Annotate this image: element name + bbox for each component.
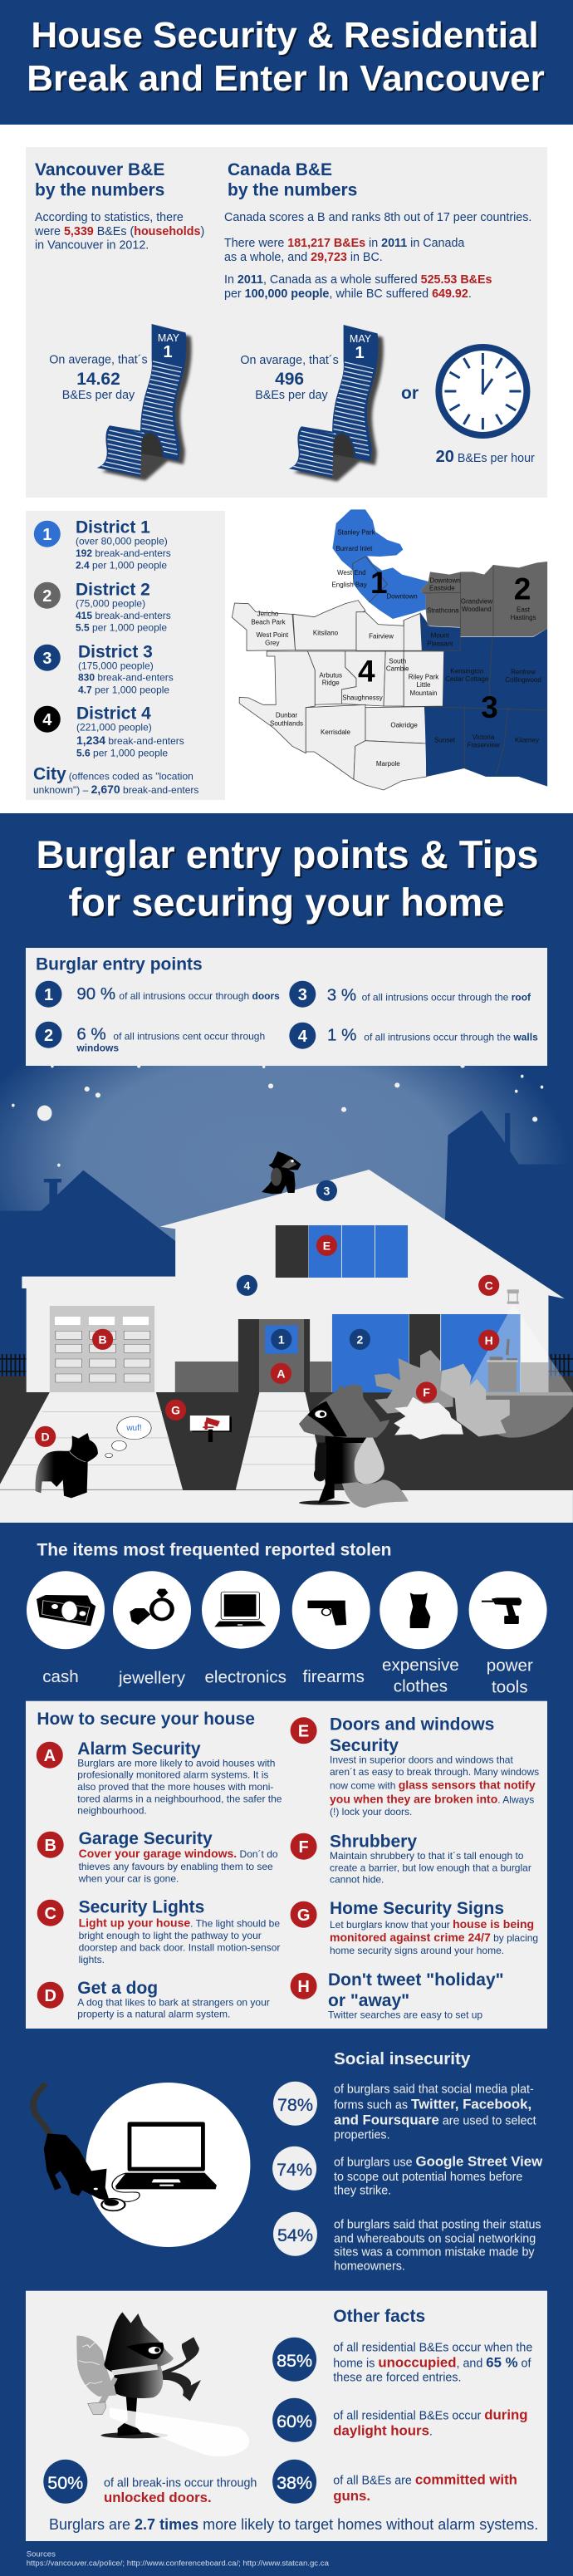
- dog: [36, 1433, 98, 1498]
- map labels: East: [517, 606, 531, 613]
- stat 50%: unlocked doors.: [104, 2490, 212, 2505]
- entry point 4: of all intrusions occur through the walls: [364, 1032, 538, 1043]
- panel: how to secure your house: [26, 1701, 547, 2029]
- tip B: [37, 1829, 278, 1884]
- map labels: West Point: [257, 631, 289, 639]
- map labels: Shaughnessy: [342, 694, 383, 702]
- map labels: South: [389, 657, 406, 665]
- text: per hour: 20 B&Es per hour: [436, 448, 535, 466]
- icon: power drill: [482, 1597, 522, 1624]
- section heading: Social insecurity: [334, 2049, 471, 2068]
- tip C: bright enough to light the pathway to your: [79, 1930, 262, 1941]
- entry point 2: [35, 1022, 265, 1054]
- entry point 4: [289, 1023, 538, 1049]
- title text: Break and Enter In Vancouver: [27, 58, 545, 99]
- illustration: cat and laptop: [33, 2083, 250, 2247]
- text: Vancouver statistics: were 5,339 B&Es (households): [34, 225, 204, 238]
- driveway: [0, 1392, 183, 1490]
- icon: clock: [438, 347, 526, 435]
- stat 78%: properties.: [334, 2128, 390, 2142]
- district 4: [34, 704, 184, 759]
- tip C: C: [44, 1905, 56, 1923]
- tip F: Shrubbery: [330, 1833, 417, 1852]
- tip G: home security signs around your home.: [330, 1945, 504, 1956]
- district 3: (175,000 people): [78, 660, 154, 671]
- icon: calendar scroll Canada: MAY: [350, 333, 372, 345]
- burglar raccoon large: [299, 1385, 409, 1508]
- map labels: [251, 528, 541, 768]
- scene: house at night: [0, 1064, 573, 1524]
- tip E: E: [298, 1723, 309, 1741]
- text: Vancouver per day: On average, that´s: [49, 354, 148, 367]
- tip F: cannot hide.: [330, 1874, 384, 1886]
- item labels: cash: [42, 1667, 79, 1686]
- icon: calendar scroll Vancouver: 1: [163, 343, 173, 361]
- section: items most frequently stolen: [0, 1523, 573, 1701]
- tip C: Light up your house. The light should be: [79, 1916, 280, 1929]
- text: Vancouver per day: [49, 354, 148, 402]
- tip A: Alarm Security: [77, 1739, 201, 1759]
- icon: calendar scroll Canada: 1: [355, 344, 365, 362]
- district 3: 4.7 per 1,000 people: [78, 684, 169, 695]
- marker circles: 1: [278, 1332, 285, 1346]
- tip G: Home Security Signs: [330, 1899, 504, 1918]
- fences: [0, 1354, 573, 1376]
- map labels: Hastings: [510, 614, 536, 621]
- district 1: 192 break-and-enters: [76, 547, 171, 559]
- tip E: (!) lock your doors.: [330, 1806, 412, 1818]
- text: Vancouver statistics: in Vancouver in 2012.: [35, 239, 149, 253]
- tip C: [37, 1898, 280, 1965]
- tip A: Burglars are more likely to avoid houses with: [77, 1757, 275, 1769]
- district 2: 415 break-and-enters: [76, 610, 171, 621]
- tip C: Security Lights: [79, 1898, 204, 1917]
- closing statement: Burglars are 2.7 times more likely to target homes without alarm systems.: [49, 2516, 538, 2533]
- map labels: Fraserview: [467, 741, 500, 748]
- stat 85%: 85%: [277, 2351, 312, 2371]
- heading: burglar entry points and tips: Burglar entry points & Tips: [37, 832, 538, 876]
- night sky gradient: [0, 980, 573, 1412]
- marker circles: 3: [324, 1184, 331, 1197]
- tip B: thieves any favours by enabling them to see: [79, 1861, 273, 1872]
- tip H: Don't tweet "holiday": [328, 1970, 504, 1990]
- header: main title: [0, 0, 573, 125]
- tip E: Security: [330, 1736, 399, 1755]
- front door: [238, 1319, 310, 1392]
- entry point 1: [35, 981, 280, 1008]
- district 1: (over 80,000 people): [76, 536, 168, 547]
- tip E: [291, 1715, 539, 1818]
- map labels: Strathcona: [427, 607, 459, 615]
- title text: House Security & Residential: [31, 15, 539, 56]
- heading: Vancouver B&E: Vancouver B&E: [35, 160, 164, 179]
- entry point 2: 2: [44, 1027, 53, 1045]
- tip F: [291, 1833, 531, 1886]
- stat 74%: they strike.: [334, 2184, 391, 2197]
- entry point 1: 1: [44, 986, 53, 1004]
- tip C: doorstep and back door. Install motion-sensor: [79, 1942, 280, 1954]
- text: Canada statistics: There were 181,217 B&Es in 2011 in Canada: [224, 237, 464, 250]
- heading: Canada B&E: Canada B&E: [228, 160, 332, 179]
- district 4: District 4: [76, 704, 151, 723]
- sidewalk: [0, 1490, 573, 1524]
- marker circles: F: [423, 1386, 430, 1399]
- tip D: property is a natural alarm system.: [77, 2009, 230, 2020]
- city offences: City: [33, 764, 66, 783]
- marker circles: 2: [357, 1332, 364, 1346]
- map labels: Kitsilano: [313, 630, 339, 637]
- tip H: [291, 1970, 504, 2020]
- city offences: (offences coded as "location: [69, 770, 193, 782]
- entry point 1: of all intrusions occur through doors: [119, 990, 280, 1002]
- district 1: [34, 518, 171, 572]
- shrubs: [375, 1350, 510, 1440]
- tip H: H: [297, 1978, 310, 1996]
- stat 60%: [272, 2398, 527, 2442]
- item circles: [27, 1571, 547, 1649]
- map labels: Mountain: [410, 689, 437, 697]
- house body: [22, 1170, 565, 1392]
- section: social insecurity: [272, 2049, 543, 2273]
- garage door: [50, 1306, 154, 1392]
- item labels: power: [487, 1656, 533, 1676]
- icon: jewellery: [130, 1589, 172, 1625]
- heading: burglar entry points and tips: for securing your home: [69, 881, 504, 925]
- stat 78%: of burglars said that social media plat-: [334, 2083, 534, 2096]
- tip A: profesionally monitored alarm systems. It is: [77, 1769, 268, 1781]
- text: Vancouver statistics: According to statistics, there: [35, 211, 184, 224]
- stat 78%: forms such as Twitter, Facebook,: [334, 2096, 531, 2112]
- entry point 3: [289, 981, 531, 1008]
- heading: Vancouver B&E: by the numbers: [35, 181, 164, 200]
- map labels: Riley Park: [409, 674, 439, 681]
- item labels: expensive: [382, 1656, 459, 1675]
- map labels: Kilarney: [515, 736, 539, 743]
- district 2: District 2: [76, 580, 150, 599]
- dark blue section background: [0, 813, 573, 2576]
- marker circles: C: [485, 1278, 493, 1292]
- tip F: create a barrier, but low enough that a burglar: [330, 1862, 531, 1873]
- map labels: Mount: [431, 632, 450, 640]
- icon: calendar scroll Vancouver: [97, 324, 192, 480]
- stat 85%: these are forced entries.: [333, 2372, 461, 2385]
- marker circles: D: [42, 1430, 50, 1443]
- entry point 4: 4: [298, 1028, 308, 1046]
- stat 38%: guns.: [333, 2488, 370, 2504]
- icon: calendar scroll Canada: [289, 325, 384, 481]
- district 1: District 1: [76, 518, 150, 537]
- map labels: West End: [337, 569, 366, 577]
- text: Vancouver statistics: [34, 211, 204, 253]
- tip F: Maintain shrubbery to that it´s tall enough to: [330, 1850, 524, 1862]
- tip F: F: [298, 1838, 309, 1857]
- tip G: [291, 1899, 538, 1956]
- map labels: Victoria: [473, 734, 495, 741]
- burglar raccoon on roof: [262, 1151, 301, 1194]
- wuf text: wuf!: [125, 1424, 142, 1433]
- map labels: Downtown: [429, 577, 461, 584]
- map labels: Cedar Cottage: [445, 675, 489, 683]
- district 4: 5.6 per 1,000 people: [76, 748, 168, 759]
- district 2: 2: [42, 587, 51, 606]
- text: Canada per day: [240, 354, 339, 402]
- foundations: [175, 1362, 238, 1392]
- sources: https://vancouver.ca/police/; http://www.conferenceboard.ca/; http://www.statcan.gc.ca: [27, 2559, 330, 2569]
- stat 78%: [273, 2082, 536, 2142]
- city offences: [33, 764, 198, 796]
- ground: [0, 1376, 573, 1490]
- map labels: Renfrew: [511, 669, 536, 676]
- lower windows: [332, 1314, 521, 1392]
- section heading: The items most frequented reported stolen: [37, 1540, 391, 1559]
- item labels: [42, 1656, 533, 1696]
- tip B: Garage Security: [79, 1829, 213, 1848]
- stat 38%: [272, 2460, 517, 2504]
- marker circles: E: [323, 1239, 331, 1252]
- text: or: or: [401, 384, 419, 403]
- map labels: Woodland: [462, 606, 492, 613]
- stat 74%: of burglars use Google Street View: [334, 2154, 543, 2170]
- neighbouring house right: [438, 1111, 573, 1376]
- district 4: 1,234 break-and-enters: [76, 734, 184, 747]
- stat 78%: and Foursquare are used to select: [334, 2112, 536, 2127]
- map labels: Beach Park: [251, 619, 286, 626]
- text: Vancouver per day: 14.62: [76, 370, 120, 389]
- map labels: Pleasant: [427, 640, 453, 648]
- map labels: Arbutus: [319, 671, 342, 679]
- map labels: 2: [514, 572, 531, 606]
- tip A: neighbourhood.: [77, 1805, 147, 1817]
- stat 60%: daylight hours.: [333, 2422, 433, 2438]
- district 2: 5.5 per 1,000 people: [76, 621, 167, 633]
- stat 38%: of all B&Es are committed with: [333, 2471, 517, 2487]
- marker circles: 4: [244, 1278, 251, 1292]
- stat 74%: 74%: [277, 2160, 312, 2180]
- tip A: also proved that the more houses with moni-: [77, 1781, 273, 1793]
- map labels: 3: [481, 690, 498, 724]
- map labels: Fairview: [369, 633, 394, 640]
- title text: [27, 15, 545, 99]
- tip C: lights.: [79, 1954, 105, 1965]
- district 4: (221,000 people): [76, 722, 152, 734]
- map labels: Dunbar: [276, 712, 297, 719]
- icon: cat: [33, 2083, 110, 2201]
- tip H: or "away": [328, 1991, 409, 2010]
- map labels: Sunset: [434, 736, 456, 743]
- security sign: [190, 1416, 232, 1442]
- icon: calendar scroll Vancouver: MAY: [158, 332, 180, 344]
- illustration: raccoon with flashlight: [76, 2312, 249, 2456]
- tip E: Doors and windows: [330, 1715, 494, 1735]
- stat 74%: to scope out potential homes before: [334, 2171, 522, 2184]
- icon: laptop: [115, 2122, 217, 2189]
- tip H: Twitter searches are easy to set up: [328, 2009, 482, 2020]
- map labels: Kensington: [450, 668, 483, 675]
- entry point 3: 3: [298, 986, 307, 1004]
- map labels: Cambie: [386, 665, 409, 673]
- text: Canada statistics: [224, 211, 531, 301]
- panel heading: How to secure your house: [37, 1710, 255, 1729]
- city offences: unknown") – 2,670 break-and-enters: [33, 783, 198, 796]
- entry point 3: of all intrusions occur through the roof: [362, 991, 531, 1003]
- stat 54%: sites was a common mistake made by: [334, 2246, 535, 2260]
- map labels: Oakridge: [390, 721, 418, 729]
- tip E: you when they are broken into. Always: [330, 1792, 534, 1805]
- marker circles: A: [277, 1367, 285, 1380]
- district 2: [34, 580, 171, 633]
- icon: pistol: [307, 1601, 346, 1626]
- map labels: Ridge: [322, 680, 340, 687]
- district 3: District 3: [78, 642, 153, 661]
- tip E: now come with glass sensors that notify: [330, 1779, 536, 1792]
- heading: burglar entry points and tips: [37, 832, 538, 925]
- sources: Sources: [27, 2550, 56, 2559]
- icon: laptop: [214, 1592, 266, 1627]
- panel: burglar entry points: [26, 948, 547, 1066]
- tip D: A dog that likes to bark at strangers on your: [77, 1996, 270, 2008]
- stars and moon: [12, 1064, 543, 1167]
- icon: dress: [410, 1592, 430, 1628]
- marker circles: H: [485, 1333, 493, 1347]
- stat 54%: and whereabouts on social networking: [334, 2232, 536, 2245]
- tip D: D: [44, 1987, 56, 2005]
- stat 60%: of all residential B&Es occur during: [333, 2407, 527, 2422]
- tip D: Get a dog: [77, 1979, 158, 1998]
- heading: Canada B&E: [228, 160, 357, 200]
- map labels: Stanley Park: [337, 528, 376, 536]
- item labels: electronics: [204, 1668, 286, 1687]
- map: Vancouver police districts: [232, 509, 547, 790]
- upper windows: [276, 1225, 408, 1278]
- district 3: [34, 642, 174, 695]
- panel heading: Burglar entry points: [36, 955, 203, 974]
- stat 60%: 60%: [277, 2412, 312, 2431]
- map labels: Grandview: [461, 597, 492, 605]
- map labels: Marpole: [376, 760, 400, 768]
- map labels: Collingwood: [505, 676, 541, 684]
- item labels: firearms: [303, 1667, 365, 1686]
- stat 50%: of all break-ins occur through: [104, 2477, 257, 2490]
- stat 85%: of all residential B&Es occur when the: [333, 2342, 532, 2355]
- security lamp and light beam: [460, 1289, 573, 1438]
- tip G: Let burglars know that your house is being: [330, 1917, 534, 1931]
- map labels: Jericho: [257, 611, 279, 618]
- desk and computer: [487, 1339, 518, 1391]
- tip A: tored alarms in a neighbourhood, the safer the: [77, 1793, 282, 1804]
- marker circles: B: [99, 1332, 107, 1346]
- stat 50%: 50%: [47, 2473, 83, 2493]
- text: Vancouver per day: B&Es per day: [62, 389, 135, 402]
- entry point 2: 6 %: [76, 1025, 106, 1044]
- map labels: 1: [370, 566, 388, 600]
- tip G: monitored against crime 24/7 by placing: [330, 1931, 538, 1944]
- map labels: Kerrisdale: [321, 729, 351, 736]
- entry point 3: 3 %: [327, 985, 356, 1004]
- stat 54%: homeowners.: [334, 2260, 405, 2273]
- text: Canada statistics: Canada scores a B and ranks 8th out of 17 peer countries.: [224, 211, 531, 224]
- stat 85%: home is unoccupied, and 65 % of: [333, 2355, 531, 2371]
- item labels: clothes: [394, 1677, 448, 1696]
- district 1: 1: [42, 526, 51, 544]
- entry point 2: of all intrusions cent occur through: [113, 1031, 265, 1043]
- stat 54%: of burglars said that posting their status: [334, 2218, 541, 2231]
- stat 54%: 54%: [277, 2225, 313, 2245]
- stat 85%: [272, 2338, 532, 2385]
- tip B: B: [44, 1837, 56, 1855]
- tip B: when your car is gone.: [78, 1872, 179, 1884]
- map labels: English Bay: [331, 581, 367, 588]
- district 1: 2.4 per 1,000 people: [76, 560, 167, 572]
- text: Canada statistics: as a whole, and 29,723 in BC.: [224, 251, 383, 264]
- text: Canada per day: B&Es per day: [255, 389, 329, 402]
- entry point 4: 1 %: [327, 1026, 356, 1045]
- tip D: [37, 1979, 270, 2020]
- panel: other facts: [26, 2291, 547, 2541]
- tip A: [37, 1739, 282, 1817]
- heading: Canada B&E: by the numbers: [228, 181, 357, 200]
- stat 54%: [273, 2212, 541, 2273]
- stat 50%: [43, 2460, 257, 2505]
- stat 38%: 38%: [277, 2473, 312, 2493]
- district 3: 830 break-and-enters: [78, 672, 174, 684]
- neighbouring house left: [0, 1170, 175, 1376]
- district 2: (75,000 people): [76, 598, 145, 610]
- district 3: 3: [42, 650, 51, 668]
- stat 74%: [272, 2147, 543, 2197]
- icon: cash: [37, 1595, 96, 1626]
- map labels: Southlands: [270, 719, 303, 727]
- text: Canada per day: 496: [275, 370, 304, 389]
- tip A: A: [44, 1747, 56, 1765]
- item labels: tools: [492, 1677, 528, 1696]
- map labels: Downtown: [386, 592, 418, 600]
- tip G: G: [297, 1906, 310, 1925]
- icon: mouse and cord: [101, 2173, 140, 2210]
- text: Canada statistics: per 100,000 people, while BC suffered 649.92.: [224, 287, 472, 301]
- marker circles: G: [171, 1403, 180, 1416]
- thought bubbles: [105, 1416, 151, 1458]
- text: Canada statistics: In 2011, Canada as a whole suffered 525.53 B&Es: [224, 273, 492, 287]
- entry point 2: windows: [76, 1043, 119, 1054]
- text: Canada per day: On avarage, that´s: [240, 354, 339, 367]
- walkway: [236, 1392, 327, 1489]
- tip B: Cover your garage windows. Don´t do: [79, 1847, 278, 1860]
- map labels: Grey: [265, 640, 279, 647]
- sources: [27, 2550, 330, 2569]
- marker circles: [35, 1180, 499, 1447]
- tip E: aren´t as easy to break through. Many windows: [330, 1766, 539, 1778]
- district 4: 4: [42, 711, 52, 729]
- item labels: jewellery: [118, 1669, 186, 1688]
- entry point 1: 90 %: [76, 984, 115, 1003]
- map labels: Burrard Inlet: [335, 545, 373, 552]
- panel: by the numbers: [26, 147, 547, 498]
- map labels: Eastside: [429, 585, 455, 592]
- map labels: 4: [358, 655, 375, 689]
- section heading: Other facts: [333, 2307, 425, 2326]
- stat 78%: 78%: [277, 2095, 313, 2115]
- panel: district legend: [26, 511, 225, 800]
- map labels: Little: [417, 681, 431, 689]
- heading: Vancouver B&E: [35, 160, 164, 200]
- tip E: Invest in superior doors and windows that: [330, 1754, 513, 1765]
